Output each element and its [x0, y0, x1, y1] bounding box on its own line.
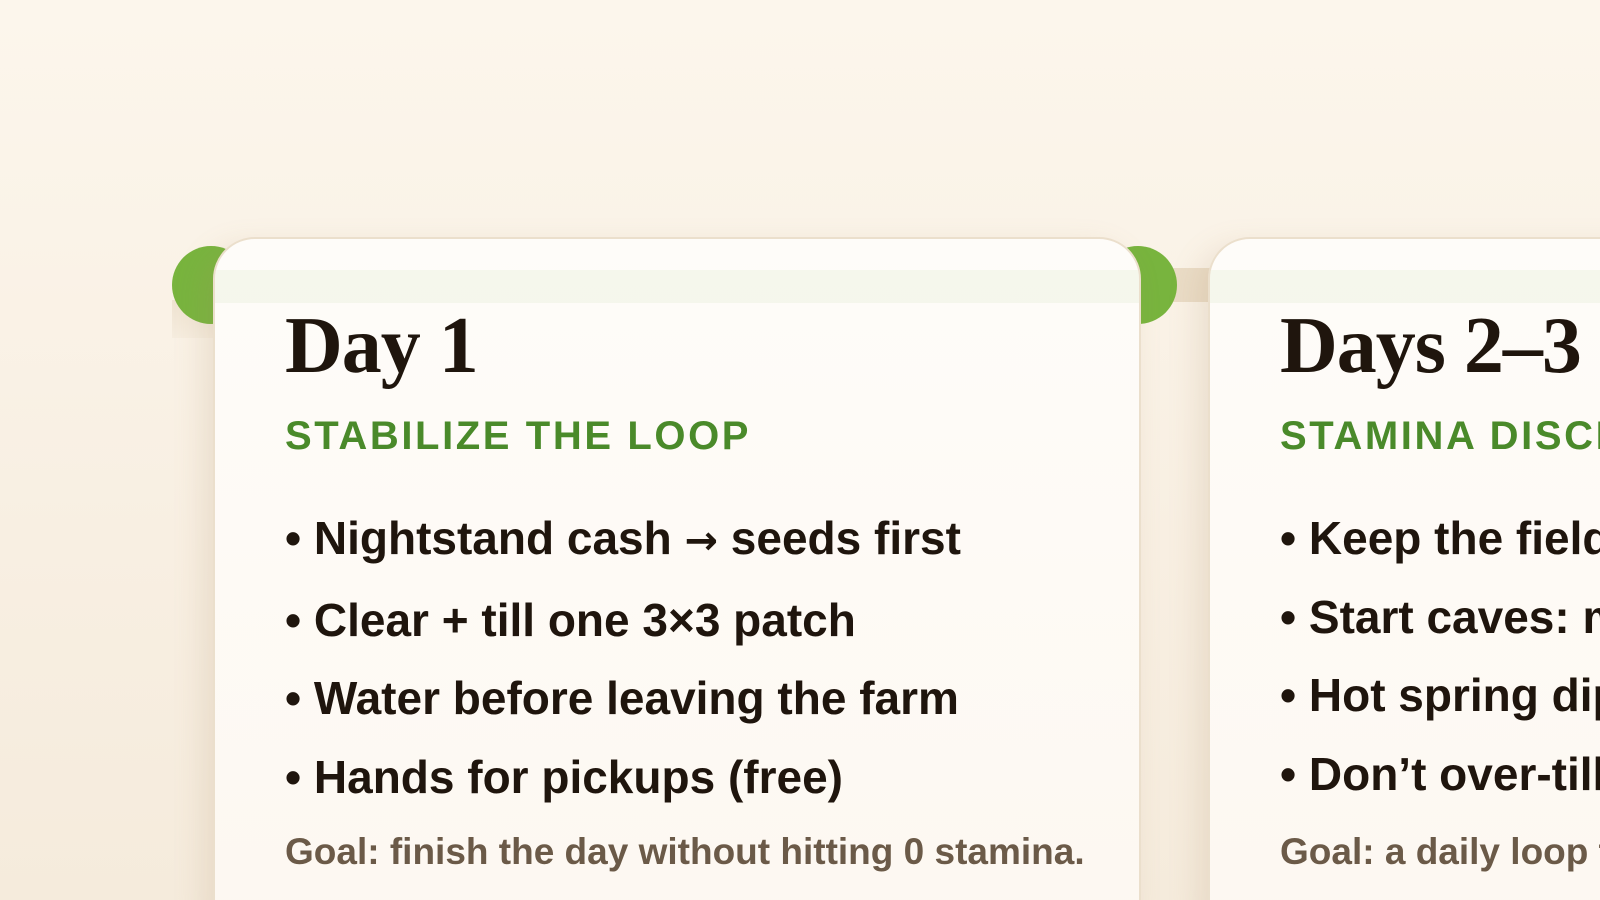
bullet list: days 2-3 tasks: • Don’t over-till [1280, 748, 1600, 800]
icon: green pin left of card 1 [172, 246, 250, 324]
subheading: stabilize the loop: STABILIZE THE LOOP [285, 414, 751, 458]
panel: Days 2-3 card [1208, 237, 1600, 900]
rail between cards [1140, 268, 1220, 302]
panel: Day 1 card [213, 237, 1141, 900]
icon: green pin right of card 1 [1099, 246, 1177, 324]
text: day 1 goal: Goal: finish the day without hitting 0 stamina. [285, 831, 1085, 872]
bullet list: day 1 tasks: • Clear + till one 3×3 patch [285, 594, 856, 646]
bullet list: day 1 tasks: • Nightstand cash → seeds first [285, 512, 961, 564]
heading: Days 2-3: Days 2–3 [1280, 302, 1581, 390]
bullet list: day 1 tasks [285, 512, 961, 802]
bullet list: day 1 tasks: • Hands for pickups (free) [285, 750, 843, 802]
heading: Day 1: Day 1 [285, 302, 478, 390]
left shadow band [172, 300, 222, 338]
bullet list: day 1 tasks: • Water before leaving the farm [285, 672, 959, 724]
bullet list: days 2-3 tasks [1280, 512, 1600, 800]
